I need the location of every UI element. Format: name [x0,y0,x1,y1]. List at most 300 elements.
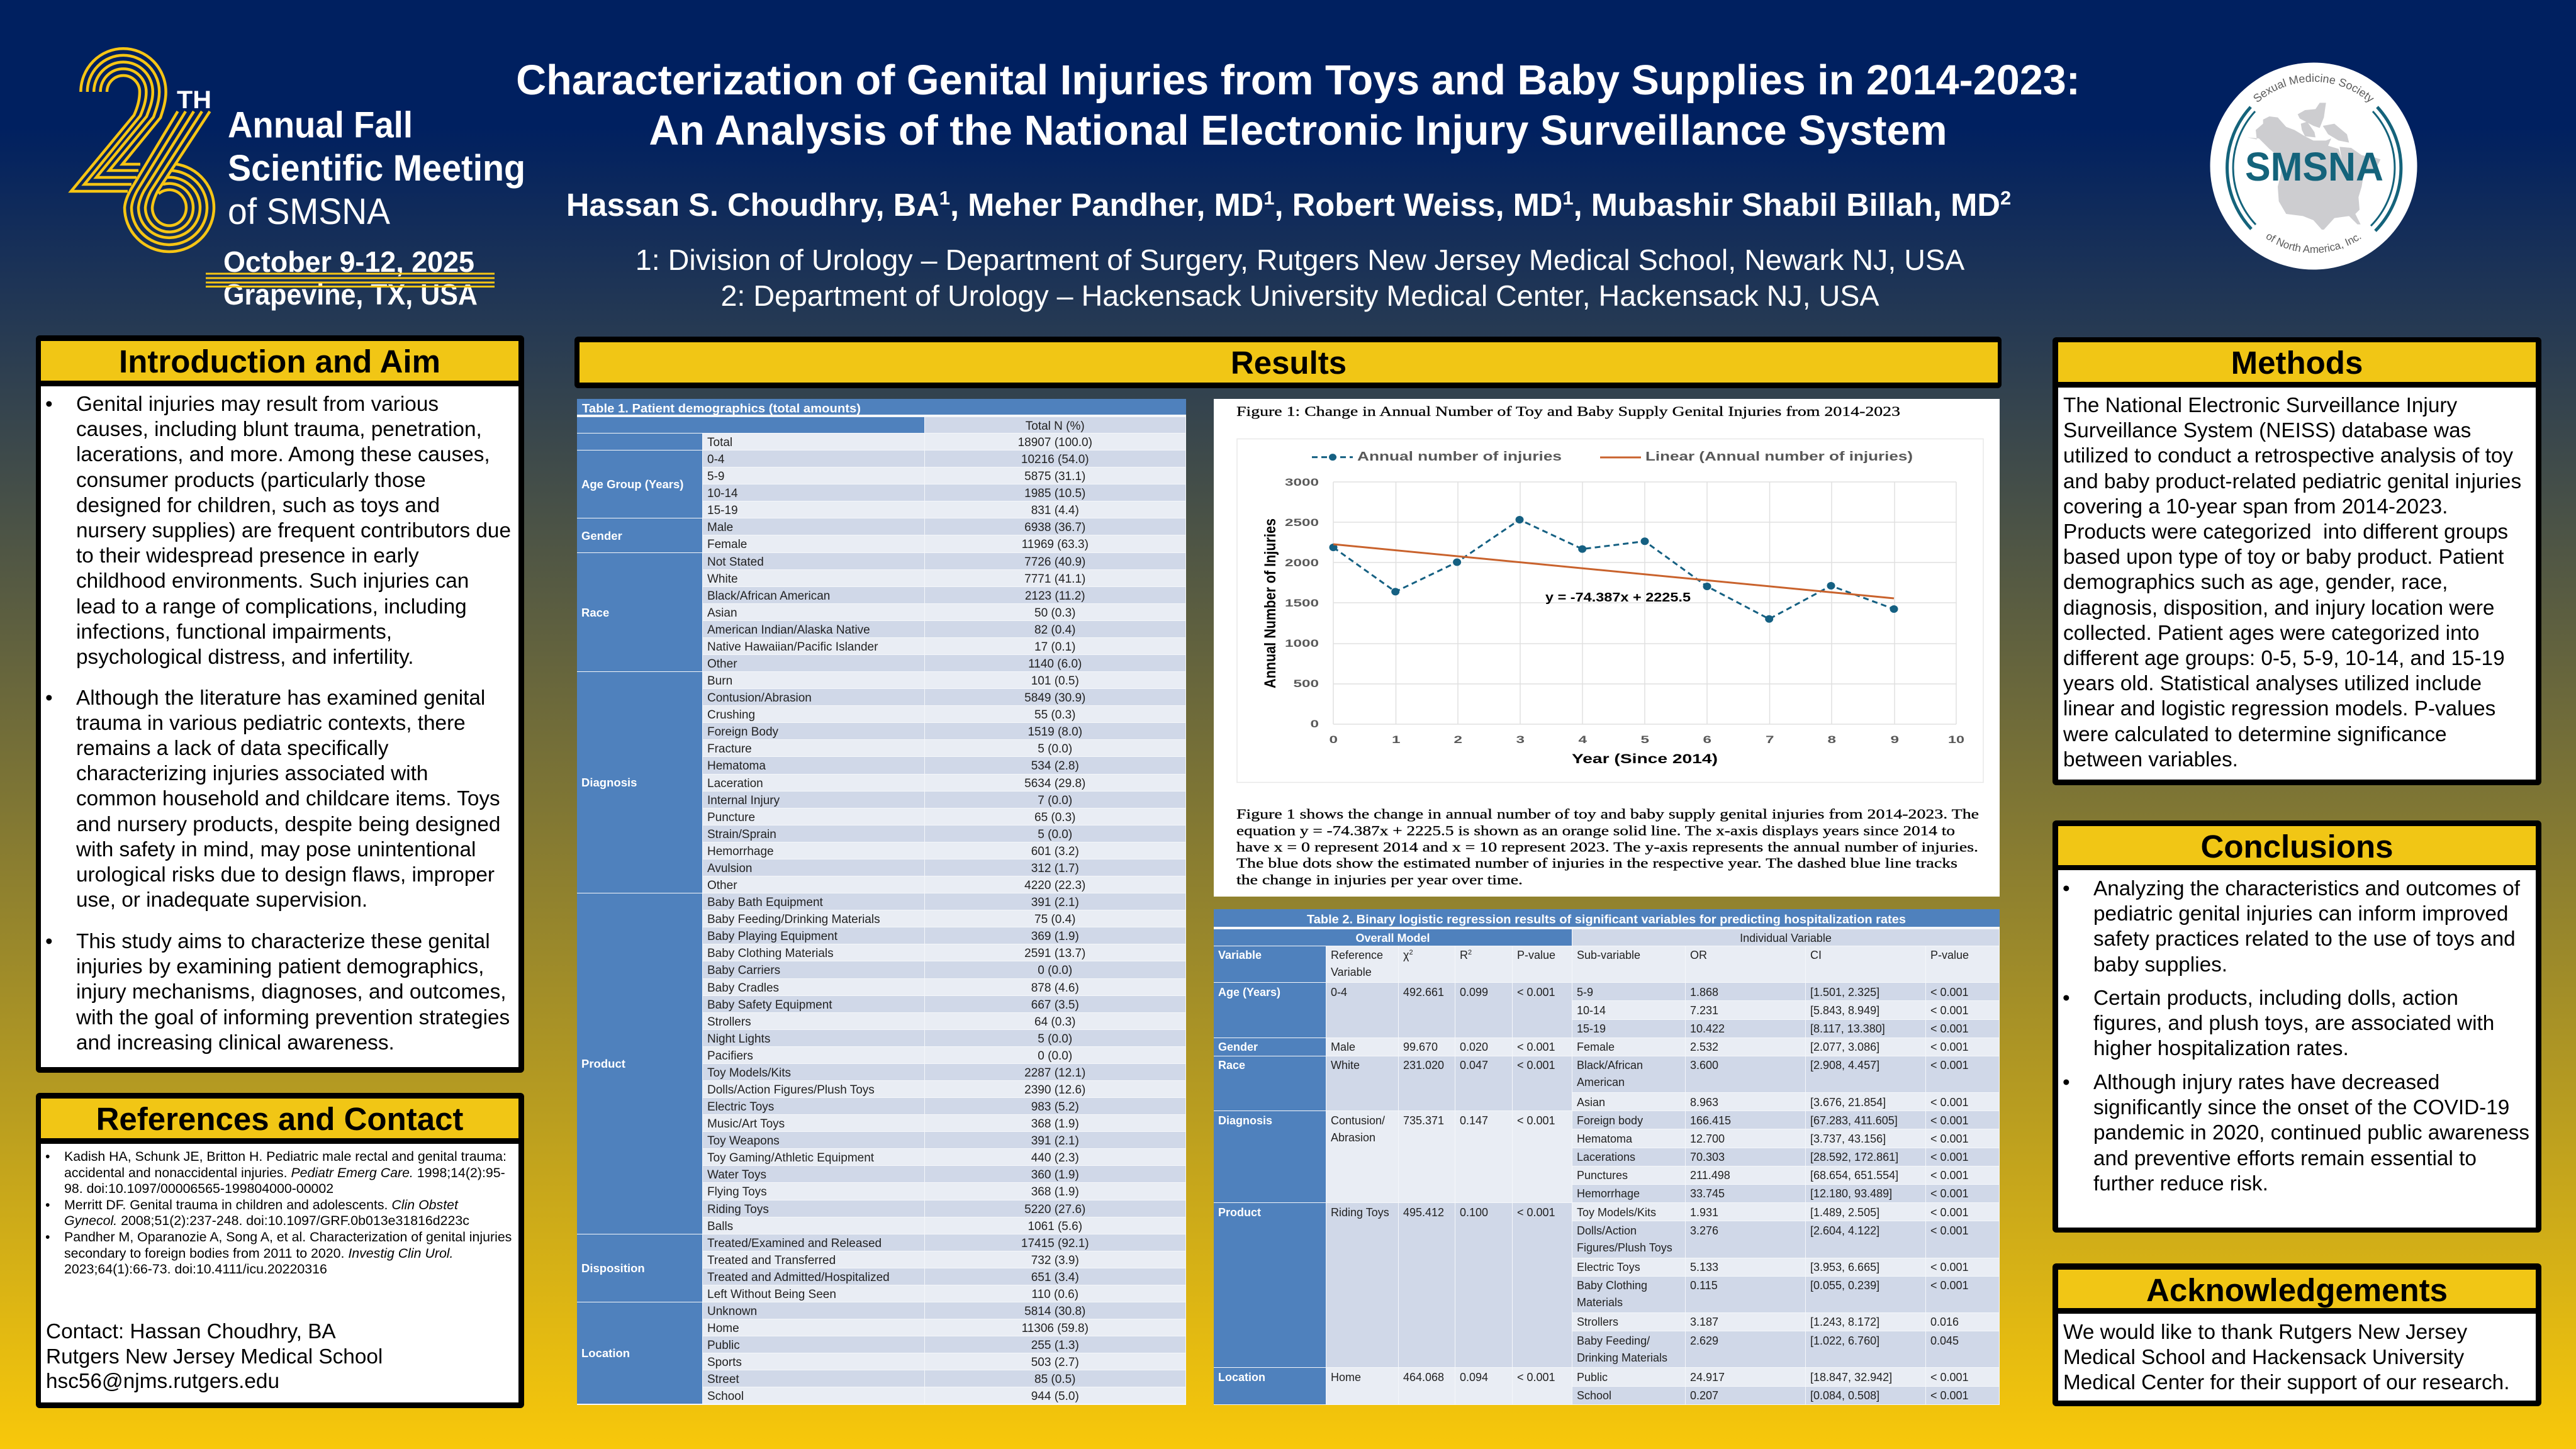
table 1 body: 64 (0.3) [1034,1015,1075,1029]
heading: methods [2058,342,2536,382]
table 1 body: 7 (0.0) [1038,794,1072,807]
table 2 body: 5.133 [1690,1261,1718,1273]
table 2 body: Figures/Plush Toys [1577,1241,1672,1254]
table 1 body: Strain/Sprain [707,828,776,841]
table 1 body: Baby Feeding/Drinking Materials [707,913,880,926]
icon: striped numeral 26 [71,48,214,252]
text block: methods: demographics such as age, gender, race, [2063,571,2448,594]
table 1 body: 368 (1.9) [1031,1185,1079,1199]
text block: methods [2058,388,2536,780]
table 2 body: < 0.001 [1930,1206,1969,1219]
table 2 body: OR [1690,949,1707,961]
table 2 body: 0.047 [1460,1059,1488,1071]
text block: conclusions bullets: • [2063,1071,2070,1094]
text block: conclusions bullets: figures, and plush toys, are associated with [2093,1012,2494,1035]
table 2 body: 10.422 [1690,1022,1725,1035]
poster title: An Analysis of the National Electronic Injury Surveillance System [649,108,1947,154]
table 1 body: 6938 (36.7) [1024,521,1085,534]
text block: introduction bullets: • [45,686,53,710]
table 1 body: 15-19 [707,504,738,517]
text block: methods: between variables. [2063,748,2238,771]
table 2 body: 464.068 [1403,1371,1444,1384]
text block: introduction bullets: urological risks due to design flaws, improper [76,863,495,887]
table 1 body: 2287 (12.1) [1024,1066,1085,1080]
y axis tick labels: 0 [1310,718,1319,730]
table 2 body: White [1331,1059,1360,1071]
figure caption: the change in injuries per year over time. [1236,872,1523,888]
table 2 body: CI [1810,949,1822,961]
text block: conclusions bullets: significantly since the onset of the COVID-19 [2093,1096,2509,1119]
table 1 body: 11969 (63.3) [1022,538,1089,551]
row group: location: Location [1218,1371,1265,1384]
meeting name text: TH [177,86,211,114]
table 2 body: < 0.001 [1930,1004,1969,1017]
table 2 body: 3.276 [1690,1224,1718,1237]
table 1 body: 5 (0.0) [1038,742,1072,756]
text block: references and contact details: Kadish HA, Schunk JE, Britton H. Pediatric male rectal and genital trauma: [64,1149,507,1164]
table 2 body: 99.670 [1403,1041,1438,1053]
table 1 body: 312 (1.7) [1031,862,1079,875]
chart legend: Annual number of injuries [1357,450,1562,464]
text block: methods: covering a 10-year span from 2014-2023. [2063,495,2448,518]
text block: introduction bullets: and nursery products, despite being designed [76,813,500,836]
text block: acknowledgements: We would like to thank Rutgers New Jersey [2063,1321,2467,1344]
table 1 body: Foreign Body [707,725,778,739]
figure caption: The blue dots show the estimated number of injuries in the respective year. The dashed blue line tracks [1236,855,1957,871]
chart legend: Linear (Annual number of injuries) [1645,450,1913,464]
text block: conclusions bullets: • [2063,987,2070,1009]
text block: introduction bullets: Genital injuries may result from various [76,393,439,416]
table 2 body: 166.415 [1690,1114,1731,1127]
table 1 body: 651 (3.4) [1031,1271,1079,1284]
table 2 body: 8.963 [1690,1096,1718,1109]
table 2 body: [3.737, 43.156] [1810,1133,1886,1145]
table 2 body: Abrasion [1331,1131,1375,1144]
table 1 body: Street [707,1373,739,1386]
text block: conclusions bullets: pandemic in 2020, continued public awareness [2093,1121,2529,1144]
affiliations: 2: Department of Urology – Hackensack University Medical Center, Hackensack NJ, USA [720,279,1879,312]
table 1 body: 732 (3.9) [1031,1254,1079,1267]
text block: references and contact details: Gynecol. 2008;51(2):237-248. doi:10.1097/GRF.0b013e31816d223c [64,1213,469,1228]
text block: introduction bullets: and increasing clinical awareness. [76,1031,395,1055]
heading: introduction and aim [41,341,518,381]
table 2 body: P-value [1517,949,1555,961]
text block: references and contact details: Rutgers New Jersey Medical School [46,1345,383,1368]
table 2 body: Drinking Materials [1577,1351,1667,1364]
table 2 body: < 0.001 [1930,1041,1969,1053]
table 1 body: Baby Bath Equipment [707,896,823,909]
table 1 body: Toy Gaming/Athletic Equipment [707,1151,874,1165]
row group: product: Product [1218,1206,1261,1219]
table 2 body: 0-4 [1331,986,1347,999]
text block: introduction bullets: causes, including blunt trauma, penetration, [76,418,482,441]
table 2 body: [1.489, 2.505] [1810,1206,1879,1219]
table 1 body: 65 (0.3) [1034,811,1075,824]
table 2 body: [2.604, 4.122] [1810,1224,1879,1237]
table 2 body: 492.661 [1403,986,1444,999]
table 2 body: [3.676, 21.854] [1810,1096,1886,1109]
table 2 body: [68.654, 651.554] [1810,1169,1898,1182]
table 2 body: [1.501, 2.325] [1810,986,1879,999]
table 1 body: 7726 (40.9) [1024,556,1085,569]
table 2 body: 10-14 [1577,1004,1606,1017]
table 1 body: 391 (2.1) [1031,896,1079,909]
table 1 body: Music/Art Toys [707,1117,785,1131]
table 1 body: Public [707,1339,740,1352]
row group: gender [1214,1038,1326,1056]
table 1 body: 2390 (12.6) [1024,1083,1085,1097]
table 1 body: 601 (3.2) [1031,845,1079,858]
icon: North America map [2248,103,2380,230]
text block: conclusions bullets: • [2063,877,2070,900]
heading: references and contact [41,1099,518,1138]
table 1 body: 55 (0.3) [1034,708,1075,722]
text block: references and contact details: accidental and nonaccidental injuries. Pediatr Emerg Care. 1998;14(2):95- [64,1165,505,1180]
row group: disposition: Disposition [581,1262,645,1275]
x axis tick labels: 4 [1578,734,1588,746]
row group: age: Age (Years) [1218,986,1280,999]
table 1 body: Dolls/Action Figures/Plush Toys [707,1083,875,1097]
text block: references and contact details: hsc56@njms.rutgers.edu [46,1370,279,1393]
x axis tick labels [1329,734,1964,746]
table 1 body: 5 (0.0) [1038,828,1072,841]
table 1 body: Male [707,521,733,534]
table 1 body: Native Hawaiian/Pacific Islander [707,641,878,654]
table 1 body: Internal Injury [707,794,780,807]
table 2 body: School [1577,1389,1611,1402]
row group: gender: Gender [1218,1041,1258,1053]
text block: methods: Products were categorized into different groups [2063,520,2508,544]
heading: acknowledgements [2058,1270,2536,1308]
text block: introduction bullets: lacerations, and more. Among these causes, [76,443,490,466]
line chart [1237,439,1983,783]
text block: introduction bullets: trauma in various pediatric contexts, there [76,712,466,735]
table 1 body: Pacifiers [707,1049,753,1063]
trend line [1333,544,1894,598]
table 2 body: Public [1577,1371,1608,1384]
panel: conclusions [2052,820,2541,1233]
text block: methods: and baby product-related pediatric genital injuries [2063,470,2521,493]
seal ring text [2254,73,2374,253]
table 2 body: 0.099 [1460,986,1488,999]
table 1 body: 5220 (27.6) [1024,1203,1085,1216]
table 2 body: Individual Variable [1740,932,1832,944]
table 2 body: [2.908, 4.457] [1810,1059,1879,1071]
table 1 body: 0 (0.0) [1038,1049,1072,1063]
table 2 body: Contusion/ [1331,1114,1385,1127]
table 1 body: 85 (0.5) [1034,1373,1075,1386]
table 1 body: Unknown [707,1305,757,1318]
table 2 body: < 0.001 [1517,1114,1555,1127]
row group: product [577,893,703,1234]
heading: references and contact: References and Contact [96,1101,463,1137]
table 1 body: Other [707,879,737,892]
trend equation: y = -74.387x + 2225.5 [1545,591,1691,605]
table 2 body: Sub-variable [1577,949,1640,961]
table 1 body [577,417,1185,1404]
table 1 body: Electric Toys [707,1100,774,1114]
table 1 body: 101 (0.5) [1031,674,1079,688]
table 2 body: Lacerations [1577,1151,1635,1163]
table 2 body: < 0.001 [1930,1133,1969,1145]
table 2 body: 24.917 [1690,1371,1725,1384]
meeting name text: Annual Fall [228,104,413,146]
seal ring text: Sexual Medicine Society [2254,73,2374,103]
table 1 body: 944 (5.0) [1031,1390,1079,1403]
table 1 body: Laceration [707,777,763,790]
table 2 body: [1.022, 6.760] [1810,1334,1879,1347]
x axis tick labels: 1 [1392,734,1401,746]
heading: conclusions: Conclusions [2200,828,2394,864]
text block: conclusions bullets: and preventive efforts remain essential to [2093,1147,2477,1170]
text block: introduction bullets: infections, functional impairments, [76,620,392,644]
text block: introduction bullets: to their widespread presence in early [76,544,419,568]
table 2 body: Hematoma [1577,1133,1632,1145]
row group: gender [577,518,703,553]
x axis tick labels: 0 [1329,734,1338,746]
text block: introduction bullets: nursery supplies) are frequent contributors due [76,519,511,542]
table 2 body: Male [1331,1041,1355,1053]
table 2 body: < 0.001 [1930,1151,1969,1163]
row group: diagnosis: Diagnosis [581,776,637,789]
table 2 body: [12.180, 93.489] [1810,1187,1892,1200]
table 1 body: Total N (%) [1026,420,1085,433]
text block: references and contact details: 2023;64(1):66-73. doi:10.4111/icu.20220316 [64,1262,327,1277]
table 1 body: 10216 (54.0) [1021,453,1089,466]
table 2 body: 1.931 [1690,1206,1718,1219]
row group: product: Product [581,1057,625,1070]
table 2 body: Variable [1218,949,1262,961]
text block: references and contact details: • [45,1229,50,1245]
table 1 body: Baby Cradles [707,982,779,994]
row group: product [1214,1203,1326,1368]
table 1 body: 1519 (8.0) [1028,725,1082,739]
text block: introduction bullets: designed for children, such as toys and [76,494,440,517]
table 2 body: 0.020 [1460,1041,1488,1053]
text block: references and contact details: secondary to foreign bodies from 2011 to 2020. Investig Clin Urol. [64,1246,453,1261]
table 1 body: 4220 (22.3) [1024,879,1085,892]
table 1 body: Treated and Transferred [707,1254,836,1267]
table 2 body: 0.115 [1690,1279,1718,1292]
table 2 body: 5-9 [1577,986,1593,999]
text block: conclusions bullets: Analyzing the characteristics and outcomes of [2093,877,2520,900]
table 1 body: 878 (4.6) [1031,982,1079,994]
table 1 body: Fracture [707,742,752,756]
table 2 body: [3.953, 6.665] [1810,1261,1879,1273]
table 1 body: Flying Toys [707,1185,767,1199]
table 2 body: 70.303 [1690,1151,1725,1163]
heading: results: Results [1231,345,1347,381]
date divider stripes [206,274,495,287]
table 1 body: Asian [707,607,737,620]
table 2 body: Foreign body [1577,1114,1643,1127]
figure 1 panel [1214,399,2000,897]
text block: introduction bullets: with safety in mind, may pose unintentional [76,838,476,861]
table 1 body: 0-4 [707,453,724,466]
table 2 body: [0.084, 0.508] [1810,1389,1879,1402]
table 1 body: Baby Safety Equipment [707,999,832,1012]
y axis title: Annual Number of Injuries [1262,518,1279,688]
table 1 body: Hematoma [707,759,766,773]
table 1 body: 1985 (10.5) [1024,487,1085,500]
table 1 body: Riding Toys [707,1203,769,1216]
y axis tick labels: 3000 [1285,476,1319,488]
row group: race [1214,1056,1326,1111]
table 2 body: < 0.001 [1517,1041,1555,1053]
table 1 body: Crushing [707,708,755,722]
text block: conclusions bullets: pediatric genital injuries can inform improved [2093,902,2508,926]
table 1 body: Not Stated [707,556,764,569]
table 2 body: < 0.001 [1930,1096,1969,1109]
table 1 body: Burn [707,674,732,688]
table 2 body: < 0.001 [1517,1206,1555,1219]
table 1 body: Female [707,538,747,551]
text block: introduction bullets: consumer products (particularly those [76,469,426,492]
text block: conclusions bullets: higher hospitalization rates. [2093,1037,2349,1060]
table 1 body: 10-14 [707,487,738,500]
table 2 body: 735.371 [1403,1114,1444,1127]
text block: conclusions bullets: further reduce risk. [2093,1172,2268,1195]
text block: introduction bullets [41,386,518,1067]
table 1 body: Water Toys [707,1168,766,1182]
table 2 body: 2.532 [1690,1041,1718,1053]
poster title [516,57,2080,154]
meeting name text: October 9-12, 2025 [223,245,474,278]
text block: conclusions bullets [2058,870,2536,1228]
text block: introduction bullets: use, or inadequate supervision. [76,888,367,912]
table 2 body: 12.700 [1690,1133,1725,1145]
table 2 body: < 0.001 [1930,1114,1969,1127]
text block: introduction bullets: remains a lack of data specifically [76,737,388,760]
text block: introduction bullets: childhood environments. Such injuries can [76,569,469,593]
table 2 body: 0.094 [1460,1371,1488,1384]
x axis tick labels: 3 [1516,734,1525,746]
table 2 body: [67.283, 411.605] [1810,1114,1898,1127]
table 2 body: Home [1331,1371,1361,1384]
panel: references and contact [36,1093,524,1408]
table 2 body: < 0.001 [1930,986,1969,999]
table 2 body: Overall Model [1355,932,1430,944]
table 1 body: 391 (2.1) [1031,1134,1079,1148]
table 1 body: 440 (2.3) [1031,1151,1079,1165]
table 1 body: White [707,573,738,586]
figure caption [1236,806,1979,888]
y axis tick labels: 2500 [1285,517,1319,529]
x axis tick labels: 10 [1948,734,1964,746]
table 2 body: 0.016 [1930,1316,1959,1328]
row group: diagnosis [1214,1111,1326,1203]
table 1 body: Baby Clothing Materials [707,947,834,960]
panel: introduction and aim [35,335,524,1073]
meeting name text: Grapevine, TX, USA [223,278,478,311]
table 1 body: 7771 (41.1) [1024,573,1085,586]
row group: location [577,1302,703,1404]
table 1 body: Night Lights [707,1032,770,1046]
table 2 body: < 0.001 [1930,1169,1969,1182]
table 2 title: Table 2. Binary logistic regression results of significant variables for predicting hospitalization rates [1307,914,1906,926]
x axis tick labels: 2 [1453,734,1462,746]
text block: references and contact details: • [45,1197,50,1212]
text block: acknowledgements: Medical Center for their support of our research. [2063,1371,2509,1394]
affiliations [636,243,1964,312]
table 2 body: [18.847, 32.942] [1810,1371,1892,1384]
table 2 body: 3.187 [1690,1316,1718,1328]
table 2 body: P-value [1930,949,1969,961]
row group: age group: Age Group (Years) [581,478,683,491]
text block: methods: were calculated to determine significance [2063,723,2446,746]
y axis tick labels: 1500 [1285,597,1319,609]
table 1 body: Other [707,657,737,671]
table 1 body: 5849 (30.9) [1024,691,1085,705]
table 1 body: 18907 (100.0) [1018,436,1092,449]
table 1 body: Contusion/Abrasion [707,691,812,705]
table 2 body: Baby Feeding/ [1577,1334,1650,1347]
table 1 body: 11306 (59.8) [1022,1322,1089,1335]
table 2 body: [0.055, 0.239] [1810,1279,1879,1292]
text block: conclusions bullets: Although injury rates have decreased [2093,1071,2439,1094]
table 2 body: < 0.001 [1930,1059,1969,1071]
table 2 body: < 0.001 [1517,1059,1555,1071]
row group: age [1214,983,1326,1038]
table 1 body: American Indian/Alaska Native [707,624,870,637]
text block: introduction bullets: lead to a range of complications, including [76,595,467,618]
text block: acknowledgements [2058,1314,2536,1401]
table 2: binary logistic regression results [1214,909,2000,1405]
text block: references and contact details [41,1144,518,1402]
text block: acknowledgements: Medical School and Hackensack University [2063,1346,2464,1369]
table 1 body: Left Without Being Seen [707,1288,836,1301]
table 2 body: 0.045 [1930,1334,1959,1347]
y axis tick labels: 500 [1294,678,1319,690]
text block: methods: linear and logistic regression models. P-values [2063,697,2495,720]
table 1 body: 667 (3.5) [1031,999,1079,1012]
text block: methods: diagnosis, disposition, and injury location were [2063,596,2494,620]
table 1 body: 17415 (92.1) [1021,1237,1089,1250]
row group: race [577,553,703,672]
table 1 body: 983 (5.2) [1031,1100,1079,1114]
row group: location: Location [581,1346,630,1360]
table 1 body: 5 (0.0) [1038,1032,1072,1046]
table 2 body: < 0.001 [1930,1389,1969,1402]
table 1 body: 369 (1.9) [1031,930,1079,943]
table 2 body: Reference [1331,949,1383,961]
table 1 body: 17 (0.1) [1034,641,1075,654]
table 1 body: Toy Weapons [707,1134,780,1148]
x axis tick labels: 6 [1703,734,1711,746]
text block: introduction bullets: with the goal of informing prevention strategies [76,1006,510,1029]
text block: references and contact details: 98. doi:10.1097/00006565-199804000-00002 [64,1181,333,1196]
table 2 body: χ2 [1403,949,1413,961]
table 1 body: 5875 (31.1) [1024,470,1085,483]
heading: conclusions [2058,825,2536,865]
table 1 body: Puncture [707,811,755,824]
table 1 body: Avulsion [707,862,752,875]
table 1 body: 2123 (11.2) [1025,590,1085,603]
table 2 body [1214,929,1999,1404]
table 1 body: 2591 (13.7) [1024,947,1085,960]
text block: references and contact details: Contact: Hassan Choudhry, BA [46,1320,336,1343]
table 1 body: 831 (4.4) [1031,504,1079,517]
table 1 body: Sports [707,1356,742,1369]
row group: diagnosis [577,672,703,893]
table 2 body: Asian [1577,1096,1605,1109]
table 2 body: < 0.001 [1930,1022,1969,1035]
table 1 body: Balls [707,1220,733,1233]
text block: references and contact details: Merritt DF. Genital trauma in children and adolescents. Clin Obstet [64,1197,458,1212]
text block: introduction bullets: injuries by examining patient demographics, [76,955,484,978]
heading: acknowledgements: Acknowledgements [2146,1272,2448,1307]
table 2 body: Materials [1577,1296,1623,1309]
